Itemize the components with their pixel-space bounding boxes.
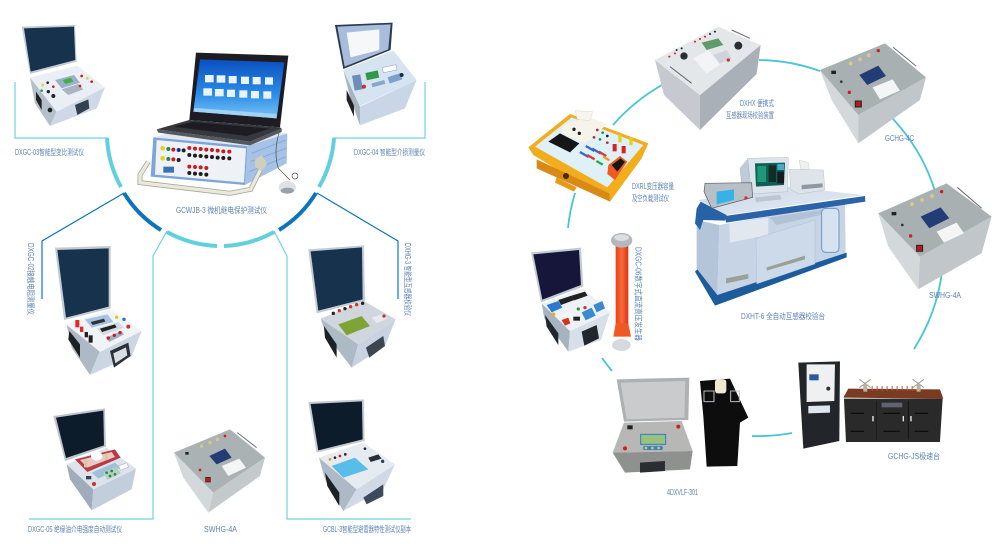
right ring arcs bbox=[568, 60, 942, 436]
device: DXHG-3 transformer calibrator bbox=[308, 245, 396, 368]
caption: DXHX line 2: 互感器现场校验装置 bbox=[726, 110, 774, 120]
cabinet bbox=[695, 202, 847, 306]
box bbox=[655, 27, 761, 130]
caption: DXGC-03: DXGC-03智能型变比测试仪 bbox=[15, 147, 84, 157]
laptop bbox=[157, 53, 288, 145]
device: GCWJB-3 laptop and relay tester bbox=[140, 53, 298, 194]
device: DXHX portable transformer calibrator bbox=[655, 27, 761, 130]
case body bbox=[30, 66, 105, 126]
device: GCHG-JS rapid bench bbox=[798, 361, 943, 449]
black HV tank bbox=[700, 379, 748, 467]
device: DXHT-6 automatic transformer calibration bench bbox=[695, 157, 865, 306]
caption: DXHT-6: DXHT-6 全自动互感器校验台 bbox=[741, 311, 825, 321]
printer, screen, keys bbox=[548, 111, 633, 180]
device: DXGC-06 digital DC high voltage generator bbox=[531, 233, 632, 352]
red HV rod bbox=[611, 233, 632, 351]
left semicircle arcs bbox=[107, 138, 334, 246]
caption: DXRL line 1: DXRL变压器容量 bbox=[632, 181, 674, 191]
device: GCHG-4C instrument bbox=[820, 43, 926, 143]
printer bbox=[789, 160, 825, 194]
monitor bbox=[740, 157, 788, 202]
lid bbox=[55, 246, 111, 320]
panel controls bbox=[40, 75, 93, 112]
device: DXGC-03 transformer ratio tester bbox=[22, 25, 105, 126]
left connector lines bbox=[15, 82, 425, 519]
caption: DXGC-02 vertical: DXGC-02接触电阻测量仪 bbox=[26, 243, 36, 315]
panel bbox=[535, 117, 643, 187]
bench instrument bbox=[704, 183, 753, 208]
case body bbox=[67, 309, 142, 375]
oil cup and controls bbox=[75, 449, 129, 486]
case body bbox=[319, 443, 395, 511]
caption: 4DXVLF-301: 4DXVLF-301 bbox=[667, 488, 698, 497]
caption: DXHX line 1: DXHX 便携式 bbox=[740, 98, 774, 108]
mouse and cable bbox=[276, 133, 298, 194]
control case bbox=[613, 378, 693, 473]
case body bbox=[321, 301, 396, 368]
caption: GCBL-3: GCBL-3智能型避雷器特性测试仪副本 bbox=[323, 524, 411, 534]
panel controls bbox=[547, 292, 605, 326]
caption: DXGC-04: DXGC-04 智能型介损测量仪 bbox=[354, 147, 425, 157]
handle and connector bbox=[140, 155, 267, 193]
socket rows bbox=[160, 146, 231, 177]
caption: GCHG-JS: GCHG-JS极速台 bbox=[888, 451, 940, 461]
panel controls bbox=[352, 65, 404, 91]
caption: DXHG-3 vertical: DXHG-3 智能型互感器校验仪 bbox=[403, 243, 413, 316]
case body bbox=[67, 448, 136, 510]
panel: green screen and sockets bbox=[332, 302, 387, 335]
caption: DXGC-06 vertical: DXGC-06数字式直流高压发生器 bbox=[634, 247, 644, 341]
case body bbox=[542, 288, 610, 352]
control rack bbox=[798, 361, 840, 449]
case body bbox=[343, 51, 417, 125]
lid bbox=[53, 408, 106, 461]
yellow case bbox=[528, 114, 648, 202]
lid bbox=[308, 245, 365, 313]
device: GCBL-3 surge arrester tester bbox=[308, 399, 395, 511]
device: 4DXVLF-301 VLF high voltage unit bbox=[613, 378, 748, 473]
panel controls bbox=[75, 314, 130, 343]
lid bbox=[22, 25, 77, 74]
caption: DXGC-05: DXGC-05 绝缘油介电强度自动测试仪 bbox=[28, 524, 122, 534]
blue screen and controls bbox=[329, 447, 384, 478]
device: DXGC-05 insulating oil tester bbox=[53, 408, 136, 510]
bench terminals bbox=[859, 379, 924, 392]
tester box bbox=[151, 129, 287, 185]
lid with chart sheet bbox=[335, 23, 393, 69]
caption: SWHG-4A left: SWHG-4A bbox=[204, 525, 238, 534]
panel controls bbox=[668, 30, 750, 83]
caption: GCWJB-3: GCWJB-3 微机继电保护测试仪 bbox=[176, 205, 267, 215]
device: DXGC-04 dielectric loss tester bbox=[335, 23, 417, 125]
device: DXRL transformer capacity tester bbox=[528, 111, 648, 202]
caption: DXRL line 2: 及空负载测试仪 bbox=[632, 193, 669, 203]
lid bbox=[531, 248, 583, 302]
caption: GCHG-4C: GCHG-4C bbox=[885, 134, 914, 143]
caption: SWHG-4A right: SWHG-4A bbox=[929, 291, 962, 300]
lid bbox=[308, 399, 365, 453]
device: SWHG-4A instrument (right) bbox=[878, 183, 992, 289]
wooden bench bbox=[843, 389, 943, 442]
device: SWHG-4A instrument (left) bbox=[174, 429, 265, 513]
device: DXGC-02 contact resistance tester bbox=[55, 246, 142, 375]
desk top bbox=[698, 187, 865, 223]
